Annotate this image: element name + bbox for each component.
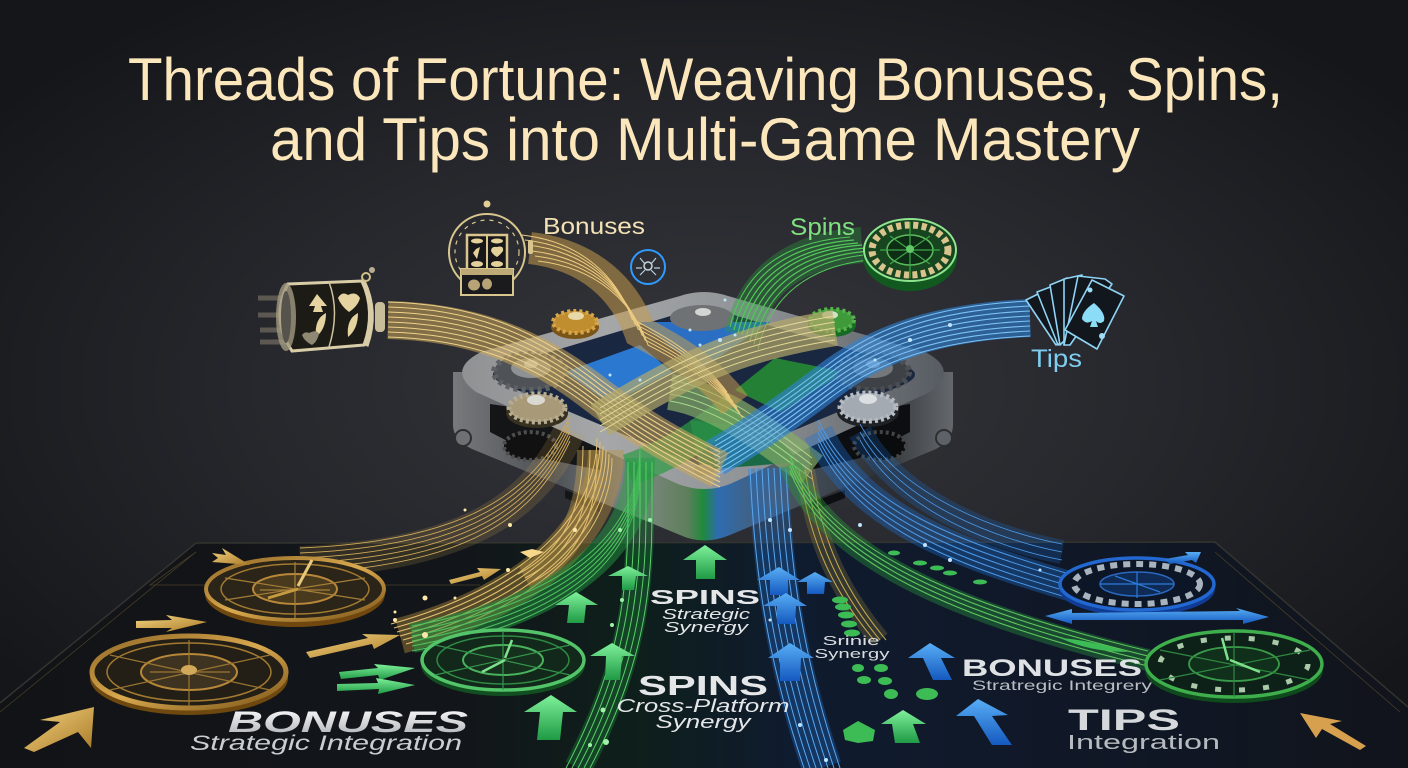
gear: top steel <box>670 305 734 331</box>
arrow: up top right <box>797 572 833 594</box>
title: Threads of Fortune: Weaving Bonuses, Spins, <box>128 46 1283 113</box>
thread bundle: green right <box>790 456 1148 666</box>
thread bundle: green left <box>412 446 640 651</box>
thread bundle: reel <box>388 302 720 487</box>
threads: outputs <box>300 416 1148 768</box>
wheel: blue <box>1059 558 1215 616</box>
gear: green <box>808 309 856 337</box>
mat caption: small synergy: Synergy <box>814 646 890 661</box>
mat caption: Tips: Integration <box>1067 732 1220 754</box>
mat caption: Bonuses left: Strategic Integration <box>190 732 462 755</box>
machine: loom body <box>453 292 953 540</box>
mat caption: Bonuses right <box>962 655 1152 693</box>
arrow: up center <box>768 643 814 681</box>
thread bundle: gold right <box>799 470 886 640</box>
arrow: up top left <box>757 567 800 595</box>
arrow: up big <box>524 695 577 740</box>
machine: inner woven window <box>493 306 915 468</box>
mat wheels <box>90 558 1323 715</box>
thread bundle: blue vertical <box>750 468 840 768</box>
thread bundle: gold crossing <box>600 316 835 432</box>
arrow: up center <box>590 643 635 680</box>
mat caption: Spins lower: Cross-Platform <box>616 696 790 716</box>
gear: front left <box>504 394 568 460</box>
icon: motion reel <box>258 267 385 351</box>
thread bundle: slot <box>522 235 743 418</box>
icon: slot machine <box>449 200 533 295</box>
thread bundle: gold lower arc <box>391 438 612 644</box>
green nodes <box>832 550 1128 743</box>
gear: back left steel <box>494 354 566 390</box>
icon: blue network badge <box>631 250 665 284</box>
mat caption: Spins upper: Synergy <box>664 619 750 636</box>
arrow: up second <box>763 593 807 624</box>
gear: gold <box>551 311 599 339</box>
arrow: up far top <box>683 545 727 579</box>
arrow: double horizontal <box>1045 608 1269 624</box>
thread bundle: blue right <box>818 420 1090 604</box>
bolt: front <box>694 464 714 476</box>
arrow: upper <box>449 568 501 584</box>
thread bundle: tips <box>715 301 1030 476</box>
arrow: up mid right <box>908 643 955 680</box>
arrow: lower left <box>24 707 94 752</box>
gold arrows <box>24 548 1366 752</box>
label: Tips: Tips <box>1031 345 1082 373</box>
arrow: top left <box>212 548 250 565</box>
arrow: up top <box>608 566 648 590</box>
arrow: up right <box>881 710 926 743</box>
thread bundle: spins <box>730 237 878 349</box>
mat caption: Spins upper: SPINS <box>650 587 760 609</box>
wheel: green right <box>1145 631 1323 703</box>
mat caption: Bonuses right: Stratregic Integrery <box>972 677 1152 693</box>
mat caption: small synergy <box>814 633 890 661</box>
blue arrows <box>757 552 1269 745</box>
gear: back right steel <box>837 354 909 390</box>
arrow: upper right <box>1165 552 1201 564</box>
mat caption: small synergy: Srinie <box>822 633 880 648</box>
panel: strategy mat <box>0 542 1408 768</box>
mat caption: Spins upper: Strategic <box>662 606 751 623</box>
arrow: up upper <box>555 592 598 623</box>
arrow: middle left <box>136 615 207 632</box>
title <box>128 46 1283 173</box>
mat caption: Bonuses left: BONUSES <box>228 706 468 739</box>
icon: green roulette wheel <box>863 219 957 291</box>
green arrows <box>337 545 1128 743</box>
threads: blue and green inputs <box>628 237 1030 479</box>
arrow: up low right <box>956 699 1012 745</box>
thread bundle: green vertical <box>566 462 652 768</box>
mat caption: Spins lower <box>616 670 790 732</box>
thread bundle: green weave <box>628 380 812 479</box>
mat caption: Tips <box>1067 704 1220 754</box>
label: Bonuses: Bonuses <box>543 213 645 239</box>
arrow: lower right <box>1300 713 1366 750</box>
mat caption: Tips: TIPS <box>1068 704 1180 737</box>
wheel: green left <box>421 630 585 696</box>
mat caption: Spins lower: Synergy <box>656 712 752 732</box>
wheel: gold front <box>90 636 288 715</box>
thread bundle: gold outer arc <box>300 416 570 573</box>
sparkles <box>393 298 1042 762</box>
wheel: gold back <box>205 558 385 627</box>
label: Spins: Spins <box>790 214 855 241</box>
arrow: long <box>306 634 400 658</box>
arrow: small glow <box>520 549 544 558</box>
icon: playing cards <box>1026 275 1124 349</box>
threads: gold inputs <box>388 235 835 487</box>
arrow: horizontal pair <box>337 664 415 694</box>
mat caption: Bonuses left <box>190 706 468 755</box>
mat caption: Spins lower: SPINS <box>638 670 768 701</box>
title: and Tips into Multi-Game Mastery <box>270 106 1140 173</box>
mat caption: Spins upper <box>650 587 760 636</box>
gears <box>494 305 909 476</box>
mat caption: Bonuses right: BONUSES <box>962 655 1142 682</box>
gear: front right <box>837 393 906 460</box>
